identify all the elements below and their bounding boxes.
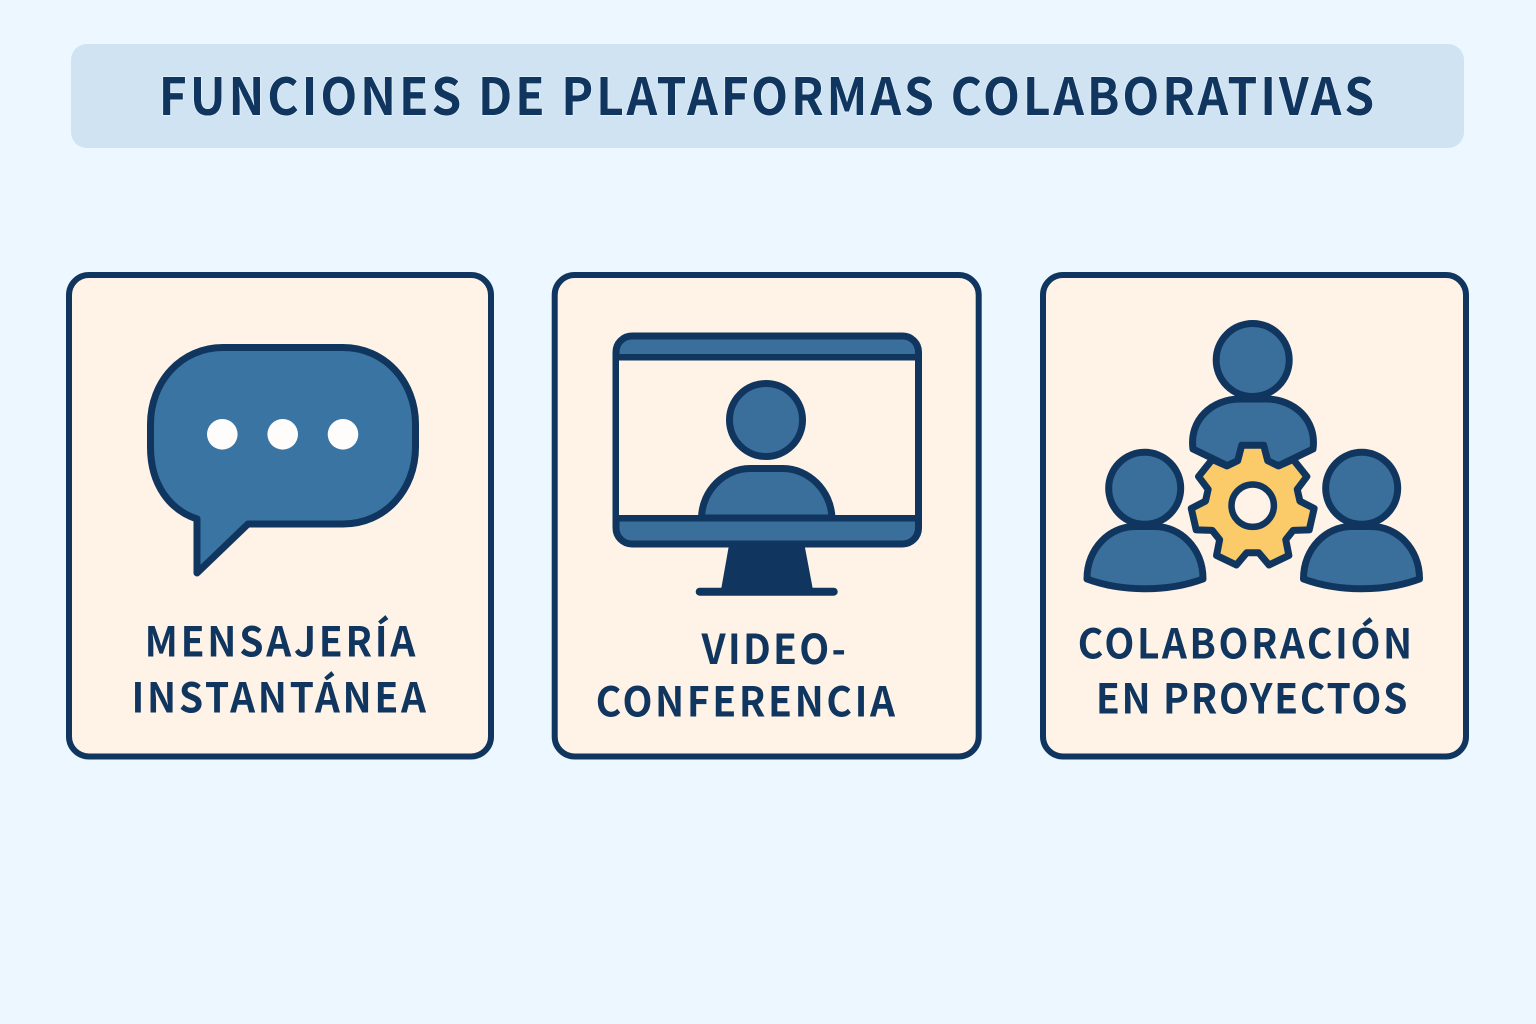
label: videoconferencia: VIDEO- xyxy=(701,617,846,676)
label: colaboración en proyectos: COLABORACIÓN xyxy=(1078,611,1412,671)
title banner xyxy=(71,44,1464,148)
panel: videoconferencia xyxy=(555,275,979,756)
panel: mensajería instantánea xyxy=(69,275,491,756)
panel: colaboración en proyectos xyxy=(1043,275,1466,756)
label: mensajería instantánea xyxy=(131,609,426,725)
label: mensajería instantánea: INSTANTÁNEA xyxy=(131,665,426,725)
label: videoconferencia xyxy=(596,617,895,729)
label: mensajería instantánea: MENSAJERÍA xyxy=(145,609,416,669)
label: colaboración en proyectos xyxy=(1078,611,1412,726)
icon: speech bubble xyxy=(150,348,416,573)
icon: team with gear xyxy=(1087,324,1420,589)
label: videoconferencia: CONFERENCIA xyxy=(596,669,895,729)
icon: monitor with person xyxy=(616,336,918,596)
icon: gear xyxy=(1191,445,1314,565)
label: colaboración en proyectos: EN PROYECTOS xyxy=(1096,666,1407,726)
title: FUNCIONES DE PLATAFORMAS COLABORATIVAS xyxy=(159,57,1374,130)
